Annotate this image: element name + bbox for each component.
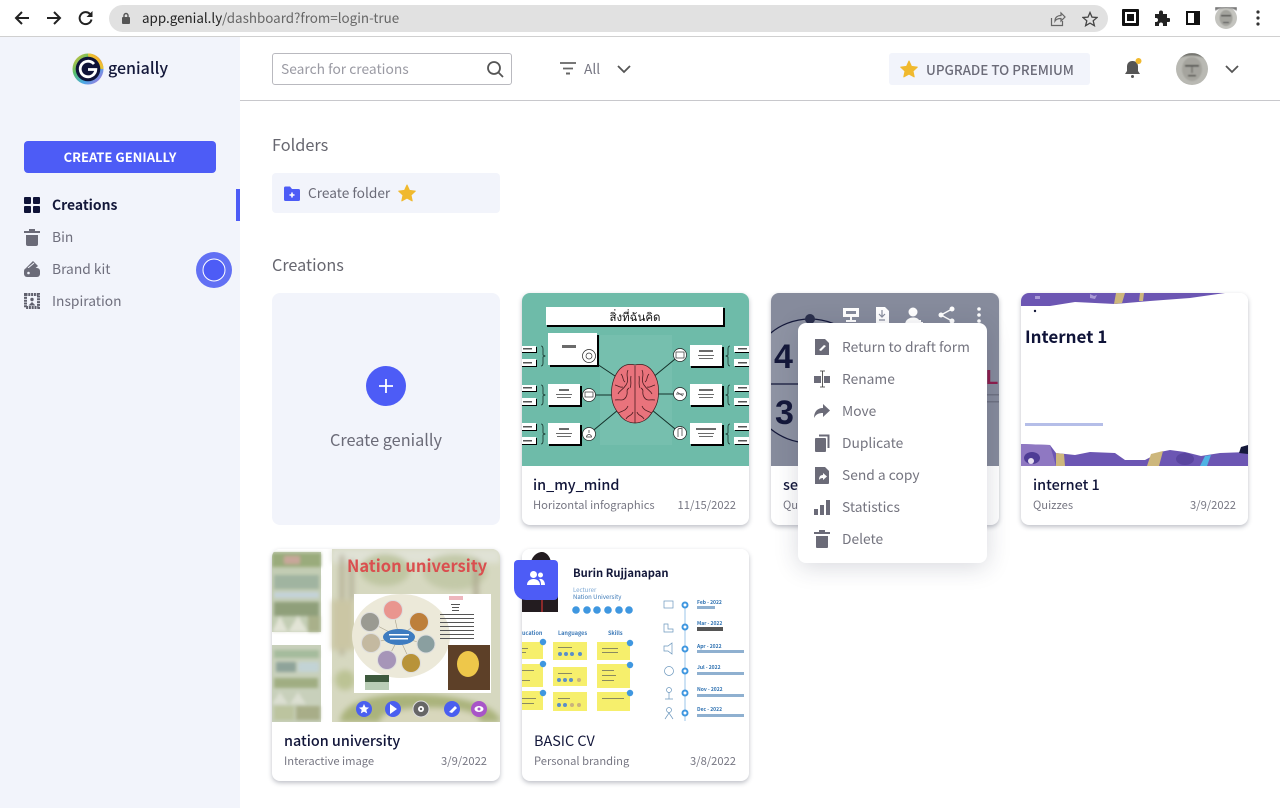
title: in_my_mind (533, 474, 619, 495)
menu item: move (798, 395, 987, 427)
label: Return to draft form (842, 336, 970, 356)
thumbnail: cv: Dec - 2022 (697, 706, 722, 713)
thumbnail: cv: Burin Rujjanapan (573, 565, 669, 581)
icon: notification bell (1125, 58, 1142, 78)
cursor highlight (196, 252, 232, 288)
thumbnail: cv: Lecturer (573, 585, 597, 594)
label: Bin (52, 226, 73, 246)
icon: bars (812, 497, 832, 517)
icon: duplicate (812, 433, 832, 453)
placeholder: Search for creations (281, 58, 409, 78)
card: nation university (272, 549, 500, 781)
address bar (109, 5, 1108, 32)
icon: edit (815, 339, 829, 355)
menu item: duplicate (798, 427, 987, 459)
url text: app.genial.ly/dashboard?from=login-true (142, 7, 399, 27)
title: nation university (284, 730, 400, 751)
thumbnail: clock quiz (771, 293, 999, 466)
icon: premium star (398, 184, 416, 202)
date: 3/8/2022 (690, 753, 736, 769)
thumbnail: cv: Mar - 2022 (697, 620, 722, 627)
thumbnail: cv: Nation University (573, 592, 622, 601)
label: Send a copy (842, 464, 920, 484)
label: Create folder (308, 182, 390, 202)
icon: menu dots (1256, 10, 1260, 26)
thumbnail: cv: Feb - 2022 (697, 599, 722, 606)
button: create genially (24, 141, 216, 173)
sidebar (0, 37, 240, 808)
card: internet 1 (1021, 293, 1248, 525)
icon: browser avatar (1215, 7, 1237, 29)
thumbnail: cv: ucation (522, 629, 543, 637)
search box (272, 53, 512, 85)
nav: bin (24, 226, 73, 246)
label: All (584, 58, 600, 78)
icon: puzzle (1155, 10, 1170, 26)
create folder button (272, 173, 500, 213)
heading: folders: Folders (272, 132, 328, 156)
date: 11/15/2022 (678, 497, 736, 513)
menu item: rename (814, 368, 895, 388)
icon: folder plus (284, 186, 300, 201)
upgrade button (889, 53, 1090, 85)
browser toolbar (0, 0, 1280, 37)
icon: send (812, 465, 832, 485)
card: in_my_mind (522, 293, 749, 525)
thumbnail: brain mind map (522, 293, 749, 466)
icon: bin (24, 229, 40, 246)
label: Move (842, 400, 876, 420)
label: Inspiration (52, 290, 122, 310)
context menu (798, 323, 987, 563)
label: Creations (52, 195, 117, 215)
date: 3/9/2022 (1190, 497, 1236, 513)
category: Horizontal infographics (533, 497, 655, 513)
menu item: send a copy (798, 459, 987, 491)
thumbnail: nation university: Nation university (347, 553, 488, 577)
icon: lock (122, 12, 130, 24)
label: Delete (842, 528, 883, 548)
nav: inspiration (24, 290, 122, 310)
thumbnail: cv: Nov - 2022 (697, 686, 723, 693)
icon: side panel (1186, 11, 1200, 25)
thumbnail: cv: Languages (558, 629, 587, 637)
icon: people (527, 570, 545, 586)
icon: move (812, 401, 832, 421)
filter (560, 58, 631, 78)
thumbnail: brain mind map: สิ่งที่ฉันคิด (609, 309, 661, 324)
icon: extension square (1122, 9, 1139, 26)
title: BASIC CV (534, 730, 595, 751)
category: Interactive image (284, 753, 374, 769)
icon: search (487, 61, 504, 78)
nav: creations (24, 195, 117, 215)
nav: brand kit (24, 258, 110, 278)
thumbnail: cv: Skills (608, 629, 623, 637)
active marker (236, 189, 240, 221)
icon: plus circle (366, 366, 406, 406)
card: basic cv (522, 549, 749, 781)
icon: bookmark star (1082, 11, 1098, 27)
label: Brand kit (52, 258, 110, 278)
icon: bin (812, 529, 832, 549)
thumbnail: cv: Apr - 2022 (696, 643, 722, 650)
category: Personal branding (534, 753, 629, 769)
card: hidden title with context menu (771, 293, 999, 525)
menu item: delete (798, 523, 987, 555)
icon: star (900, 60, 918, 78)
thumbnail: clock quiz: 4 (774, 338, 793, 376)
icon: filter (560, 62, 576, 74)
icon: rename (814, 370, 830, 388)
label: Statistics (842, 496, 900, 516)
button: create genially: CREATE GENIALLY (64, 147, 176, 166)
category: Quizzes (1033, 497, 1073, 513)
label: Duplicate (842, 432, 903, 452)
label: UPGRADE TO PREMIUM (926, 59, 1074, 79)
thumbnail: internet 1 quiz (1021, 293, 1248, 466)
label: Create genially (330, 427, 442, 451)
user avatar (1176, 53, 1208, 85)
icon: back arrow (14, 11, 29, 25)
menu item: statistics (798, 491, 987, 523)
thumbnail: nation university (272, 549, 500, 722)
icon: inspiration (24, 293, 40, 309)
logo wordmark: genially (108, 55, 168, 79)
header rule (240, 100, 1280, 101)
icon: grid (24, 197, 40, 213)
menu item: return to draft form (815, 336, 970, 356)
card: create genially (272, 293, 500, 525)
icon: account chevron (1225, 65, 1239, 74)
logo (72, 54, 168, 84)
icon: share page (1050, 12, 1066, 26)
icon: forward arrow (47, 11, 62, 25)
date: 3/9/2022 (441, 753, 487, 769)
thumbnail: cv (522, 549, 749, 722)
icon: brand kit (24, 261, 40, 277)
thumbnail: cv: Jul - 2022 (697, 664, 721, 671)
thumbnail: clock quiz: 3 (775, 394, 794, 432)
thumbnail: clock quiz: L (986, 367, 998, 389)
icon: chevron (617, 65, 631, 74)
icon: logo ring (72, 54, 104, 84)
partial category: Qu (783, 497, 798, 513)
icon: reload (78, 11, 92, 26)
heading: creations: Creations (272, 252, 344, 276)
partial title: se (783, 474, 798, 495)
thumbnail: internet 1 quiz: Internet 1 (1025, 323, 1107, 348)
badge: shared group (514, 560, 558, 600)
label: Rename (842, 368, 895, 388)
title: internet 1 (1033, 474, 1100, 495)
